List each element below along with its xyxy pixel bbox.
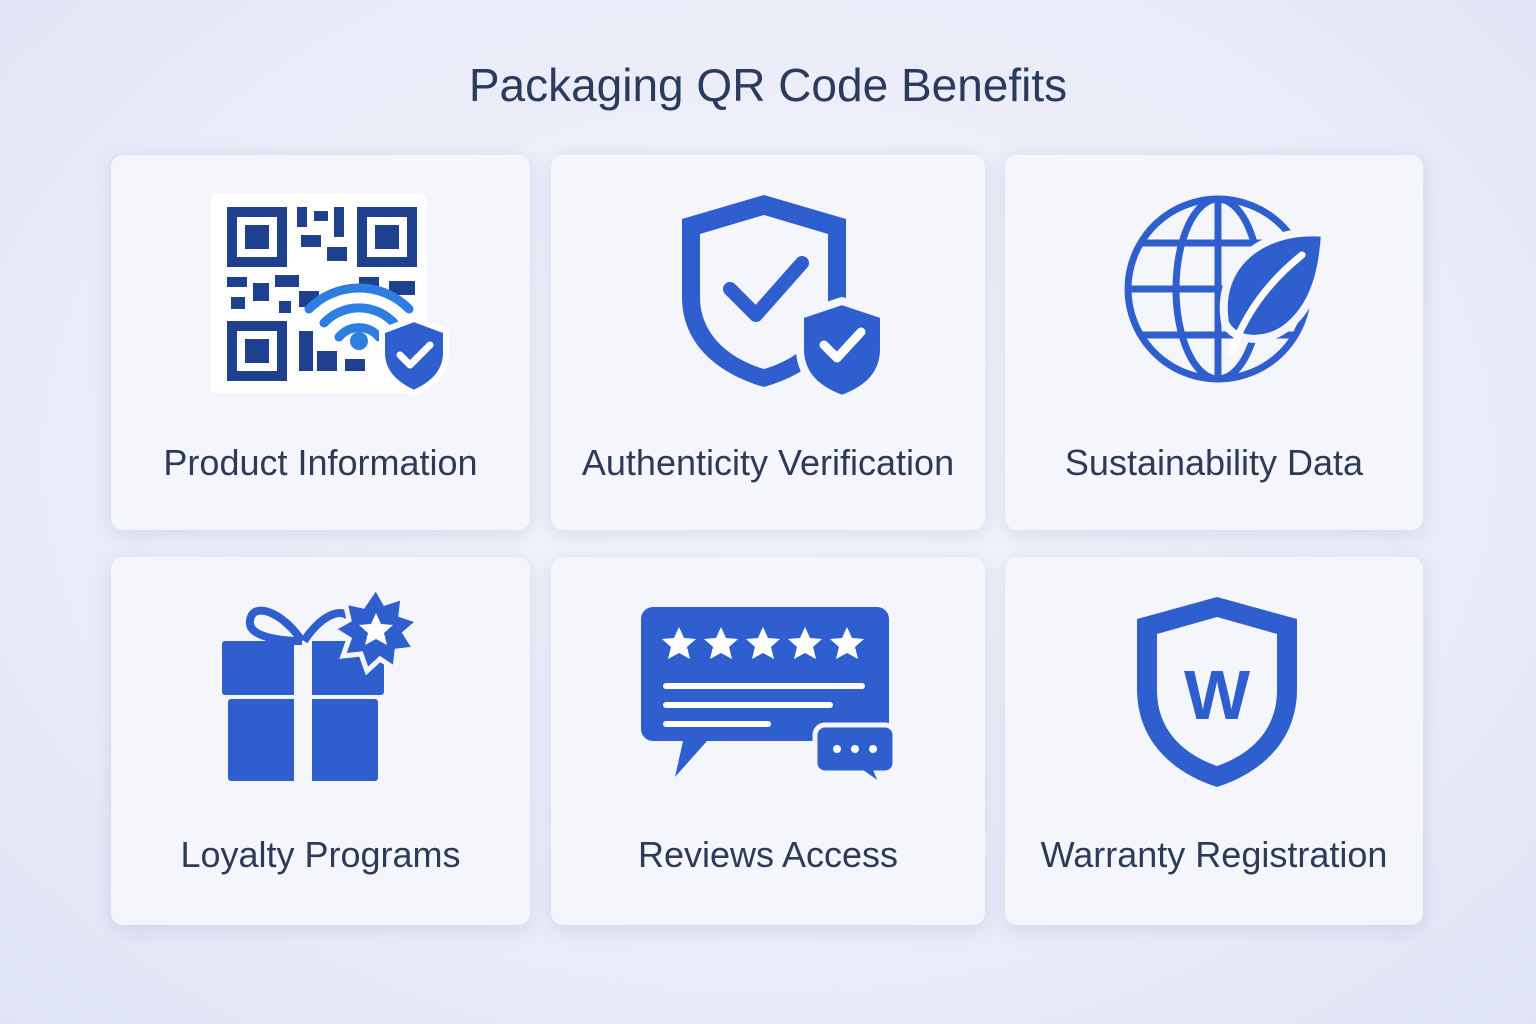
label: Reviews Access [638, 834, 898, 875]
panel: product information [111, 155, 530, 530]
panel: loyalty programs [111, 557, 530, 925]
label: Product Information [163, 442, 478, 483]
icon: warranty shield [1137, 597, 1297, 787]
icon: qr code [211, 193, 449, 396]
icon: globe with leaf [1124, 196, 1321, 382]
label: Authenticity Verification [582, 442, 954, 483]
panel: reviews access [551, 557, 985, 925]
panel: sustainability data [1005, 155, 1423, 530]
label: Warranty Registration [1041, 834, 1387, 875]
icon: shields [682, 195, 880, 395]
label: Loyalty Programs [180, 834, 461, 875]
icon: gift with badge [222, 592, 414, 781]
icon: warranty shield: W [1184, 656, 1250, 734]
label: Sustainability Data [1065, 442, 1363, 483]
panel: warranty registration [1005, 557, 1423, 925]
panel: authenticity verification [551, 155, 985, 530]
icon: review speech bubble [641, 607, 892, 780]
title: Packaging QR Code Benefits [469, 59, 1067, 111]
